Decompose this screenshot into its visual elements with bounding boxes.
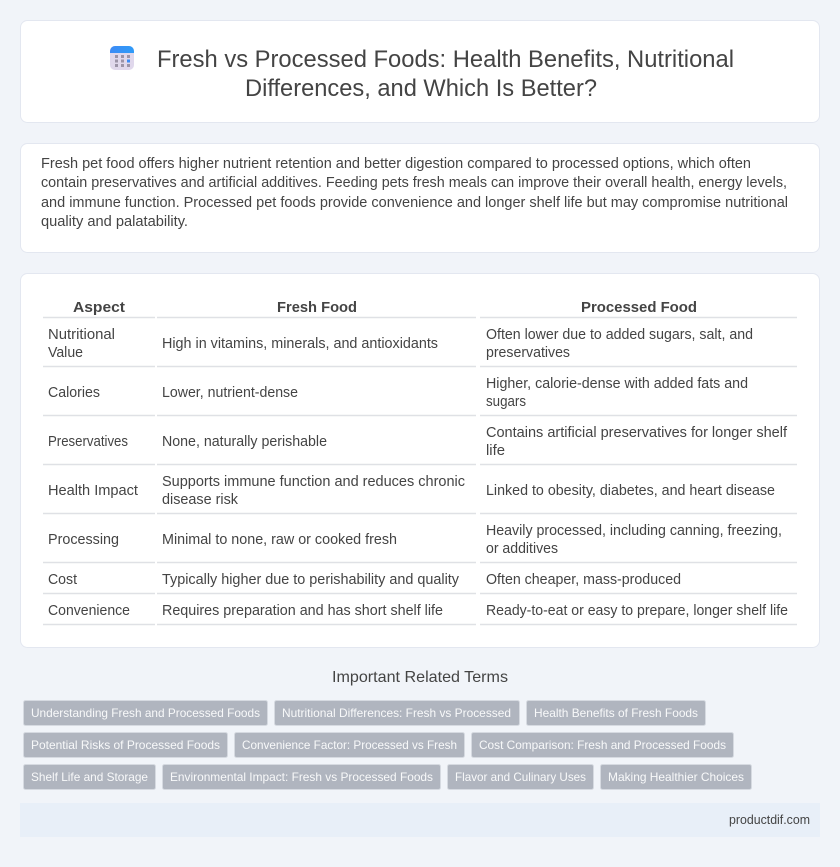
intro text block: Fresh pet food offers higher nutrient retention and better digestion compared to processed options, which often: [41, 156, 751, 172]
table header: Fresh Food: [277, 299, 357, 316]
row: nutritional value: Value: [48, 345, 83, 361]
row: convenience: Requires preparation and has short shelf life: [162, 603, 443, 619]
row: processing: Minimal to none, raw or cooked fresh: [162, 532, 397, 548]
intro text block: and immune function. Processed pet foods provide convenience and longer shelf life but may compromise nutritional: [41, 195, 788, 211]
intro text block: [41, 156, 788, 230]
row: processing: Processing: [48, 532, 119, 548]
related term chips: Convenience Factor: Processed vs Fresh: [242, 738, 457, 752]
row: processing: or additives: [486, 541, 558, 557]
footer bar: productdif.com: [729, 813, 810, 827]
table header: [73, 299, 697, 316]
related term chips: Environmental Impact: Fresh vs Processed Foods: [170, 770, 433, 784]
intro text block: contain preservatives and artificial additives. Feeding pets fresh meals can improve their overall health, energy levels,: [41, 175, 787, 191]
title: [157, 46, 734, 102]
row: convenience: [48, 603, 788, 619]
title: Differences, and Which Is Better?: [245, 75, 597, 102]
row: nutritional value: preservatives: [486, 345, 570, 361]
row: preservatives: life: [486, 443, 505, 459]
footer bar: [20, 803, 820, 837]
row: nutritional value: High in vitamins, minerals, and antioxidants: [162, 336, 438, 352]
related term chips: Making Healthier Choices: [608, 770, 744, 784]
related term chips: Flavor and Culinary Uses: [455, 770, 586, 784]
row: nutritional value: Often lower due to added sugars, salt, and: [486, 327, 753, 343]
row: calories: sugars: [486, 394, 526, 410]
panel: introduction: [20, 144, 820, 252]
row: processing: [48, 523, 782, 557]
related term chips: [24, 700, 752, 790]
row: preservatives: Preservatives: [48, 434, 128, 450]
row: preservatives: Contains artificial preservatives for longer shelf: [486, 425, 788, 441]
row: health impact: Linked to obesity, diabetes, and heart disease: [486, 483, 775, 499]
row: calories: Calories: [48, 385, 100, 401]
table header: Aspect: [73, 299, 125, 316]
title: Fresh vs Processed Foods: Health Benefits, Nutritional: [157, 46, 734, 73]
row: health impact: Supports immune function and reduces chronic: [162, 474, 465, 490]
related term chips: Shelf Life and Storage: [31, 770, 148, 784]
row: calories: Higher, calorie-dense with added fats and: [486, 376, 748, 392]
related term chips: Potential Risks of Processed Foods: [31, 738, 220, 752]
panel: title header: [20, 20, 820, 122]
heading: important related terms: Important Related Terms: [332, 669, 508, 686]
row: convenience: Ready-to-eat or easy to prepare, longer shelf life: [486, 603, 788, 619]
row: health impact: [48, 474, 775, 508]
related term chips: Understanding Fresh and Processed Foods: [31, 706, 260, 720]
row: health impact: disease risk: [162, 492, 239, 508]
row: cost: Typically higher due to perishability and quality: [162, 572, 460, 588]
row: calories: Lower, nutrient-dense: [162, 385, 298, 401]
intro text block: quality and palatability.: [41, 214, 188, 230]
row: calories: [48, 376, 748, 410]
row: health impact: Health Impact: [48, 483, 138, 499]
row: nutritional value: [48, 327, 753, 361]
panel: comparison table: [20, 274, 820, 648]
row: cost: Often cheaper, mass-produced: [486, 572, 681, 588]
row: preservatives: [48, 425, 788, 459]
row: nutritional value: Nutritional: [48, 327, 115, 343]
related term chips: Nutritional Differences: Fresh vs Processed: [282, 706, 511, 720]
icon: calendar: [110, 46, 134, 70]
row: convenience: Convenience: [48, 603, 130, 619]
row: cost: Cost: [48, 572, 77, 588]
table header: Processed Food: [581, 299, 697, 316]
row: preservatives: None, naturally perishable: [162, 434, 327, 450]
related term chips: Health Benefits of Fresh Foods: [534, 706, 698, 720]
related term chips: Cost Comparison: Fresh and Processed Foods: [479, 738, 726, 752]
row: processing: Heavily processed, including canning, freezing,: [486, 523, 782, 539]
row: cost: [48, 572, 681, 588]
